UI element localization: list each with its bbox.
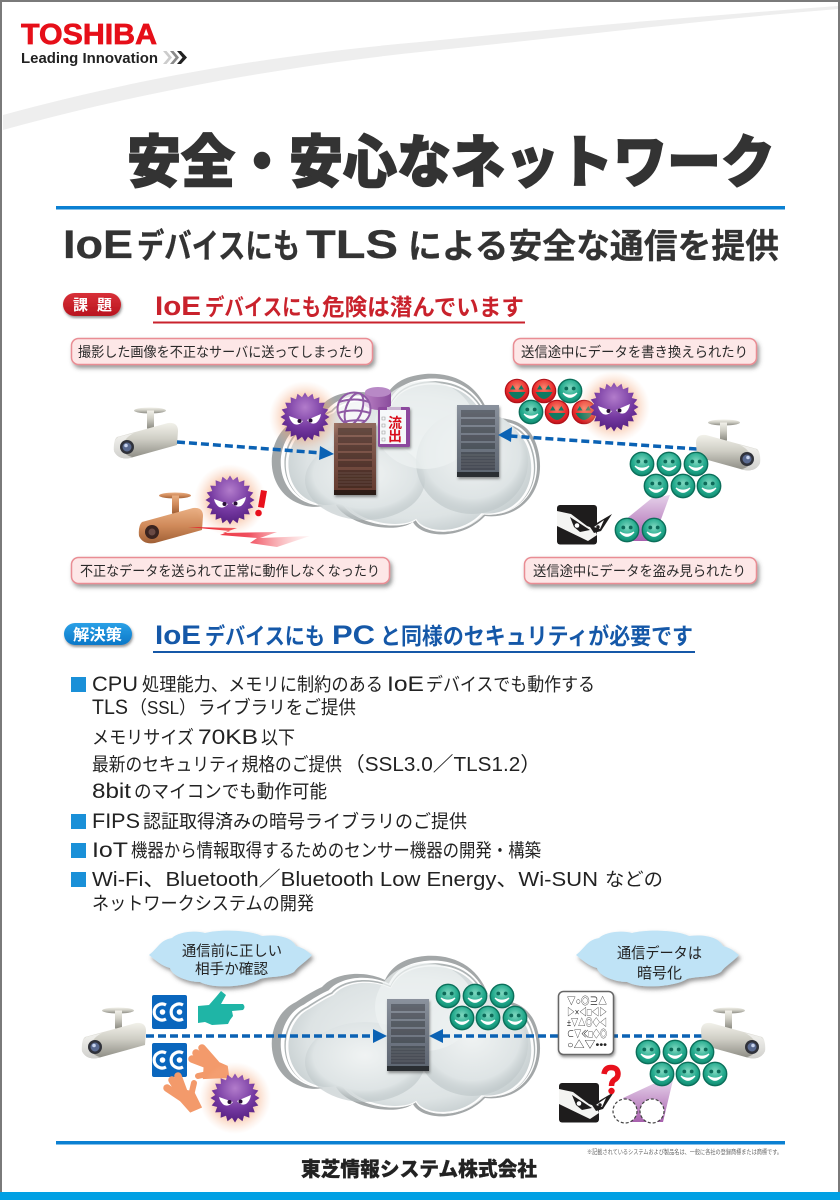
virus: tampering with data [578,371,650,443]
icon: leaked document: 出 [388,428,402,444]
bottom bar [0,1192,840,1200]
section heading: solution: と同様のセキュリティが必要です [380,623,693,649]
callout: malicious data causes malfunction [72,558,390,584]
camera: top left [114,408,178,458]
server: compromised brown [334,423,376,495]
speech cloud: encrypted data: 暗号化 [637,965,682,982]
cloud: problem diagram [272,374,540,534]
solutions list: Wi-Fi、Bluetooth／Bluetooth Low Energy、Wi-SUN [92,868,598,891]
solutions list: 認証取得済みの暗号ライブラリのご提供 [143,811,467,832]
camera: top right [696,420,760,470]
solutions list: 最新のセキュリティ規格のご提供 [92,754,342,775]
cloud: solution diagram [272,956,540,1116]
solutions list: ネットワークシステムの開発 [92,893,314,914]
icon: teal pointing hand [198,991,244,1025]
icon: certificate rejected [152,1043,187,1077]
data group: encrypted transit [636,1040,727,1086]
solutions list: 機器から情報取得するためのセンサー機器の開発・構築 [131,840,541,861]
footer rule [56,1141,785,1144]
data group: in transit [630,452,721,498]
callout: data rewritten in transit: 送信途中にデータを書き換えられたり [521,344,748,360]
server: secure [387,999,429,1071]
virus: rejected [199,1062,271,1134]
data group: snooped [615,518,666,542]
solutions list: IoT [92,839,128,862]
speech cloud: verify partner [149,931,312,986]
subtitle: TLS [306,223,398,267]
speech cloud: verify partner: 通信前に正しい [182,943,282,960]
speech cloud: encrypted data: 通信データは [617,944,702,962]
subtitle: デバイスにも [137,227,300,266]
tampered data group [505,379,596,424]
section heading: problem: IoE [155,291,201,321]
section heading: problem: 危険は潜んでいます [322,294,524,320]
solutions list: 以下 [261,727,295,748]
data group: in cloud [436,984,527,1030]
icon: question mark [604,1068,618,1094]
section heading: solution: IoE [155,620,201,650]
arrow: camera to server, right [429,1029,702,1043]
title: 安全・安心なネットワーク [127,131,775,195]
icon: snooper [557,505,612,544]
icon: globe [338,391,370,427]
company name: 東芝情報システム株式会社 [301,1157,537,1181]
icon: certificate valid [152,995,187,1029]
subtitle: による安全な通信を提供 [408,228,779,266]
camera: compromised brown [139,492,203,543]
camera: bottom left [82,1008,146,1058]
solutions list: CPU [92,673,138,696]
beam: snoop fails [623,1080,673,1122]
icon: leaked document: 流 [388,415,402,431]
callout: data snooped in transit: 送信途中にデータを盗み見られたり [533,563,746,579]
section heading: solution: デバイスにも [205,623,325,649]
icon: database [365,387,391,410]
callout: data rewritten in transit [514,338,756,364]
section badge: problem: 課 題 [73,297,112,314]
callout: malicious data causes malfunction: 不正なデータを送られて正常に動作しなくなったり [80,563,380,579]
subtitle [63,223,779,267]
subtitle: IoE [63,223,133,267]
server: gray [457,405,499,477]
footnote: ※記載されているシステムおよび製品名は、一般に各社の登録商標または商標です。 [587,1147,782,1156]
icon: encrypted text box [558,992,614,1054]
section badge: solution: 解決策 [73,625,123,644]
icon: leaked document [378,407,410,447]
speech cloud: verify partner: 相手か確認 [195,961,269,978]
solutions list: ライブラリをご提供 [198,697,356,718]
solutions list: のマイコンでも動作可能 [134,781,327,802]
arrow: camera to gray server [498,427,697,449]
icon: encrypted text box: ±▽△◎◇◁ [567,1017,607,1029]
icon: exclamation mark [255,490,267,516]
solutions list: （SSL3.0／TLS1.2） [344,753,541,776]
section heading: problem: デバイスにも [205,294,321,320]
section heading: solution: PC [332,620,375,650]
arrow: camera to server, left [146,1029,387,1043]
icon: encrypted text box: ▷×◁□◁▷ [567,1006,607,1018]
speech cloud: encrypted data [576,931,739,986]
icon: orange hand, upper [192,1048,226,1076]
solutions list: IoE [387,673,424,696]
solutions list: TLS [92,696,128,719]
title rule [56,206,785,210]
header swoosh [3,6,838,130]
icon: snooper confused [559,1083,614,1122]
callout: data snooped in transit [524,558,756,584]
solutions list: などの [605,869,663,890]
logo: Toshiba: Leading Innovation [21,50,158,67]
empty data placeholders [613,1099,664,1123]
icon: encrypted text box: ▽○◎⊇△ [567,996,607,1008]
solutions list: FIPS [92,810,140,833]
section heading: solution [153,620,695,653]
icon: orange hand, lower [167,1076,198,1109]
solutions list: メモリサイズ [92,727,194,748]
callout: sends images to a rogue server [72,338,372,364]
virus: on server [269,381,341,453]
solutions list: 70KB [198,726,258,749]
icon: red lightning [188,527,310,547]
logo: Toshiba: TOSHIBA [21,19,157,51]
icon: encrypted text box: ⊂▽≪□◇◎ [567,1028,607,1040]
virus: attacking camera [194,464,266,536]
callout: sends images to a rogue server: 撮影した画像を不正なサーバに送ってしまったり [78,344,365,360]
solutions list: （SSL） [130,697,196,718]
camera: bottom right [701,1008,766,1058]
section badge: problem [63,293,121,316]
solutions list: 8bit [92,780,131,803]
logo: Toshiba [21,19,187,67]
section badge: solution [64,623,132,645]
solutions list: デバイスでも動作する [426,674,595,695]
section heading: problem [153,291,525,324]
solutions list: 処理能力、メモリに制約のある [142,674,383,695]
solutions list [71,673,663,914]
beam: snooping [625,495,670,541]
arrow: camera to compromised server [177,442,334,460]
icon: encrypted text box: ○△▽••• [567,1039,608,1051]
